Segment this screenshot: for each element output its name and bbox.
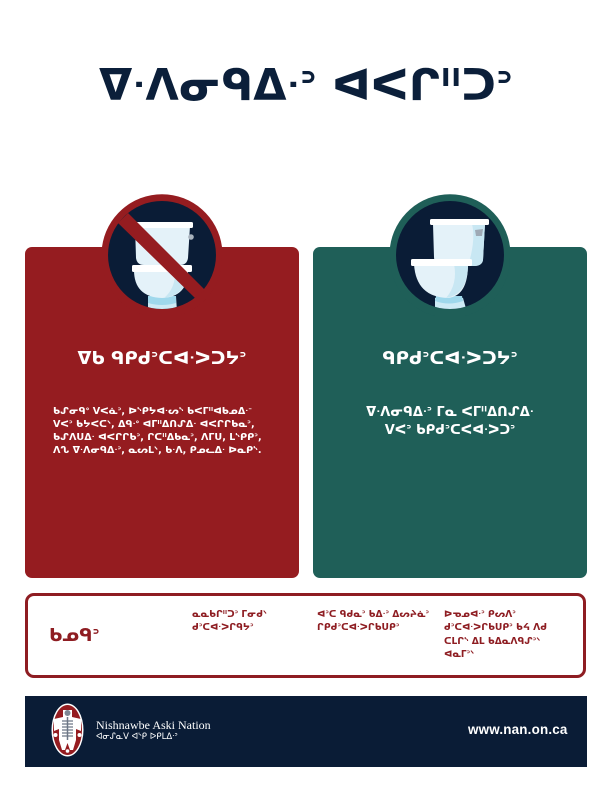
- title: ᐁᐧᐱᓂᑫᐃᐧᐣ ᐊᐸᒋᐦᑐᐣ: [99, 61, 513, 111]
- column 1 text: ᓇᓇᑲᒋᐦᑐᐣ ᒥᓂᑯᐠ: [192, 609, 267, 620]
- column 1 text: [192, 609, 267, 633]
- panel: why box: [25, 593, 586, 678]
- column 1 text: ᑯᐣᑕᐊᐧᐳᒋᑫᔭᐣ: [192, 622, 254, 633]
- text block: items not to flush: ᑲᔑᐱᑌᐃᐧ ᐊᐸᒋᒋᑲᐣ, ᒋᑕᐦᐃᑲᓇᐣ, ᐱᒥᑌ, ᒪᔅᑭᑭᐣ,: [53, 432, 262, 443]
- column 3 text: ᐊᓇᒥᐣᐠ: [444, 649, 474, 660]
- icon: Nishnawbe Aski Nation logo: [52, 704, 84, 756]
- text block: items not to flush: ᐱᔐ ᐁᐧᐱᓂᑫᐃᐧᐣ, ᓇᔕᒪᐠ, ᑲᐧᐱ, ᑭᓄᓚᐃᐧ ᐅᓇᑭᔅ.: [53, 445, 261, 456]
- text block: what to flush: [366, 405, 534, 438]
- column 3 text: ᐅᓀᓄᐊᐧᐣ ᑭᔕᐱᐣ: [444, 609, 516, 620]
- footer band: [25, 696, 587, 767]
- icon: crossed-out toilet: [102, 194, 222, 309]
- text block: items not to flush: [53, 406, 262, 456]
- website: www.nan.on.ca: [468, 722, 568, 737]
- column 2 text: ᒋᑭᑯᐣᑕᐊᐧᐳᒋᑲᑌᑭᐣ: [317, 622, 399, 633]
- logo wordmark: [96, 718, 211, 742]
- organisation name: Nishnawbe Aski Nation: [96, 718, 211, 732]
- organisation name in syllabics: ᐊᓂᔑᓇᐯ ᐊᔅᑭ ᐅᑭᒪᐃᐧᐣ: [96, 732, 178, 742]
- panel: do not flush: [25, 247, 299, 578]
- text block: items not to flush: ᐯᐸᐣ ᑲᔭᐸᑕᐠ, ᐃᑫᐧᐤ ᐊᒥᐦᐃᑎᔑᐃᐧ ᐊᐸᒋᒋᑲᓇᐣ,: [53, 419, 255, 430]
- column 2 text: [317, 609, 429, 633]
- text block: what to flush: ᐯᐸᐣ ᑲᑭᑯᐣᑕᐸᐊᐧᐳᑐᐣ: [385, 423, 515, 438]
- heading: do not flush: ᐁᑲ ᑫᑭᑯᐣᑕᐊᐧᐳᑐᔭᐣ: [77, 348, 247, 369]
- column 2 text: ᐊᐣᑕ ᑫᑯᓇᐣ ᑲᐃᐧᐣ ᐃᔕᔨᓈᐣ: [317, 609, 429, 620]
- column 3 text: [444, 609, 547, 660]
- heading: flush: ᑫᑭᑯᐣᑕᐊᐧᐳᑐᔭᐣ: [382, 348, 518, 369]
- column 3 text: ᑕᒪᒋᔅ ᐃᒪ ᑲᐃᓇᐱᑫᔑᐣᐠ: [444, 636, 540, 647]
- text block: what to flush: ᐁᐧᐱᓂᑫᐃᐧᐣ ᒥᓇ ᐸᒥᐦᐃᑎᔑᐃᐧ: [366, 405, 534, 420]
- heading: why: ᑲᓄᑫᐣ: [49, 625, 100, 646]
- panel: flush: [313, 247, 587, 578]
- icon: toilet: [390, 194, 510, 309]
- text block: items not to flush: ᑲᔑᓂᑫᐤ ᐯᐸᓈᐣ, ᐅᔅᑭᔭᐊᐧᔕᔅ ᑲᐸᒥᐦᐊᑲᓄᐃᐧᐨ: [53, 406, 252, 417]
- column 3 text: ᑯᐣᑕᐊᐧᐳᒋᑲᑌᑭᐣ ᑲᔦ ᐱᑯ: [444, 622, 547, 633]
